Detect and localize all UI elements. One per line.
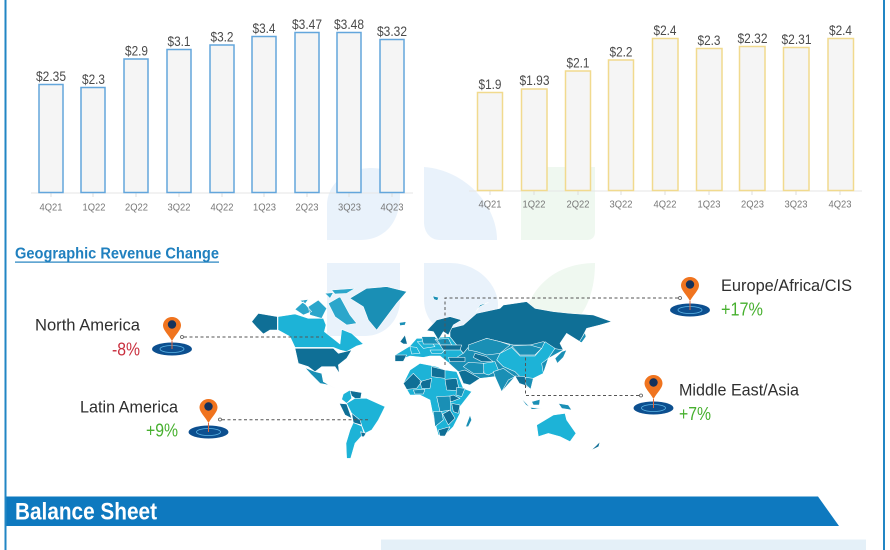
bar chart: left quarterly series: $3.2 <box>210 30 234 44</box>
icon: location pin <box>634 375 674 414</box>
callout: europe africa cis: Europe/Africa/CIS <box>721 277 852 295</box>
bar chart: right quarterly series: 4Q23 <box>828 198 852 210</box>
callout: latin america: Latin America <box>80 398 179 416</box>
bar chart: left quarterly series: $3.1 <box>168 34 190 49</box>
bar chart: left quarterly series: $3.47 <box>292 17 322 32</box>
icon: location pin <box>670 277 710 316</box>
bar chart: right quarterly series: $2.31 <box>782 32 812 47</box>
bar chart: left quarterly series: 3Q23 <box>338 202 361 214</box>
callout: europe africa cis: +17% <box>721 298 763 320</box>
bar chart: right quarterly series: $2.3 <box>698 33 720 48</box>
bar chart: right quarterly series: 2Q22 <box>566 198 590 210</box>
callout: north america <box>35 316 192 360</box>
callout: middle east asia: Middle East/Asia <box>679 382 800 400</box>
bar chart: right quarterly series: 3Q22 <box>610 198 633 210</box>
bar chart: right quarterly series: $2.4 <box>829 23 852 38</box>
bar chart: right quarterly series: 1Q22 <box>522 198 546 210</box>
callout: north america: -8% <box>112 338 140 360</box>
bar chart: right quarterly series: 1Q23 <box>698 198 721 210</box>
connector lines <box>184 298 678 420</box>
bar chart: left quarterly series: 2Q22 <box>125 202 148 214</box>
bar chart: left quarterly series: 3Q22 <box>168 202 191 214</box>
bar chart: right quarterly series: 4Q22 <box>654 198 677 210</box>
bar chart: right quarterly series: $2.32 <box>738 31 768 46</box>
bar chart: left quarterly series: $2.35 <box>36 69 66 84</box>
bar chart: left quarterly series: 4Q23 <box>380 202 404 214</box>
callout: north america: North America <box>35 316 141 334</box>
icon: location pin <box>152 317 192 356</box>
bar chart: left quarterly series: 4Q21 <box>40 202 63 214</box>
callout: middle east asia: +7% <box>679 403 711 424</box>
americas and greenland <box>252 287 407 458</box>
bar chart: left quarterly series: 1Q22 <box>82 202 106 214</box>
callout: middle east asia <box>634 375 800 424</box>
europe, africa, asia and oceania <box>395 296 612 451</box>
icon: location pin <box>188 399 228 438</box>
world map <box>252 287 612 458</box>
banner: balance sheet <box>6 496 839 526</box>
callout: europe africa cis <box>670 277 852 320</box>
bar chart: right quarterly series: 4Q21 <box>478 198 502 210</box>
bar chart: left quarterly series: $2.3 <box>82 72 105 87</box>
callout: latin america <box>80 398 228 440</box>
watermark logo <box>327 167 595 336</box>
bar chart: right quarterly series: $1.93 <box>520 73 550 88</box>
bar chart: right quarterly series: $2.1 <box>566 56 590 70</box>
bar chart: left quarterly series: 2Q23 <box>296 202 319 214</box>
bar chart: right quarterly series: $2.4 <box>654 23 677 38</box>
bar chart: right quarterly series: $1.9 <box>478 77 502 92</box>
bar chart: left quarterly series: $3.4 <box>252 21 276 36</box>
banner: balance sheet: Balance Sheet <box>15 498 157 526</box>
bar chart: left quarterly series <box>31 17 413 214</box>
bar chart: right quarterly series: 2Q23 <box>741 198 764 210</box>
callout: latin america: +9% <box>146 420 178 440</box>
bar chart: left quarterly series: 1Q23 <box>253 202 276 214</box>
bar chart: right quarterly series: 3Q23 <box>784 198 808 210</box>
bar chart: right quarterly series <box>469 23 862 210</box>
bar chart: left quarterly series: $2.9 <box>125 44 148 58</box>
heading: geographic revenue change: Geographic Revenue Change <box>15 246 219 262</box>
panel: balance sheet table top edge <box>381 540 866 550</box>
bar chart: left quarterly series: 4Q22 <box>210 202 234 214</box>
bar chart: left quarterly series: $3.32 <box>377 24 407 39</box>
bar chart: left quarterly series: $3.48 <box>334 17 364 32</box>
bar chart: right quarterly series: $2.2 <box>610 44 632 60</box>
